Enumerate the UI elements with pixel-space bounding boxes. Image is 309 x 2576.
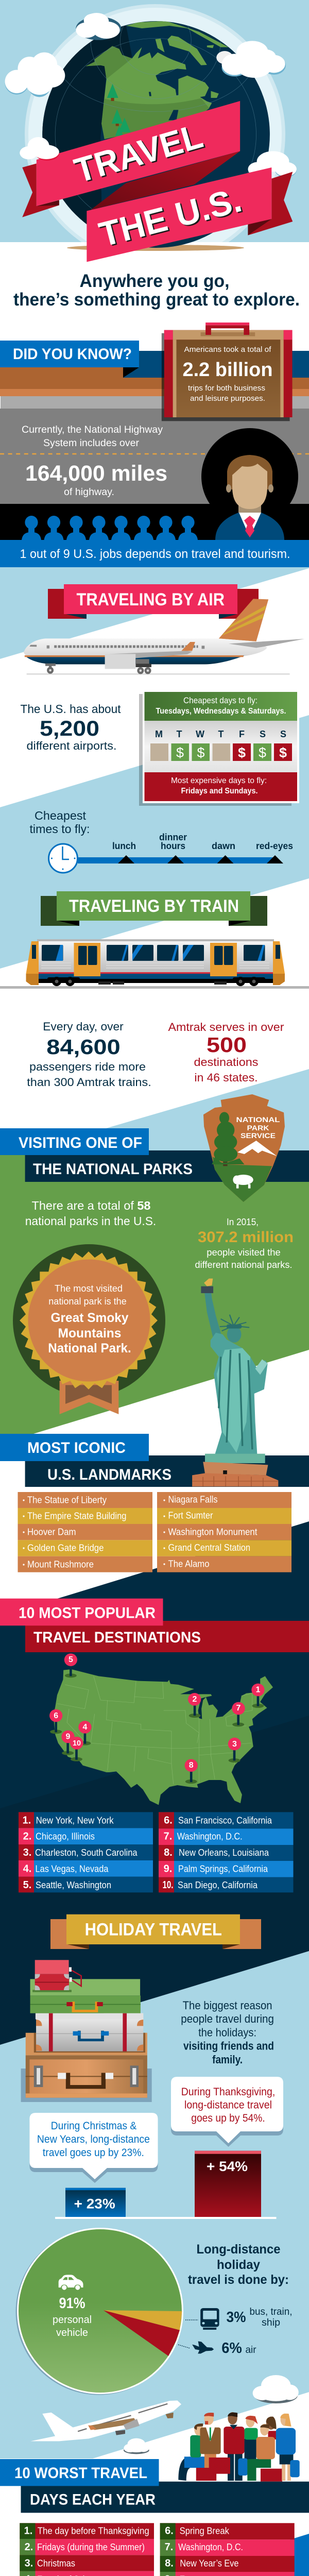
worst days table right: Washington, D.C. bbox=[178, 2542, 243, 2552]
weekday letters: F bbox=[239, 729, 245, 739]
illustration: group of travelers with luggage bbox=[178, 2412, 300, 2482]
text: 5,200 airports: The U.S. has about bbox=[21, 702, 121, 716]
worst days table right: Spring Break bbox=[180, 2526, 230, 2536]
pin 9 palm springs bbox=[61, 1731, 75, 1755]
destinations table left: 2. bbox=[23, 1831, 31, 1842]
pin 5 seattle: 5 bbox=[68, 1655, 73, 1664]
heading: 10 most popular travel destinations: TRAVEL DESTINATIONS bbox=[33, 1629, 201, 1646]
text: highway stat: System includes over bbox=[43, 438, 140, 449]
panel: light blue holiday background bbox=[0, 1951, 309, 2459]
pin 9 palm springs: 9 bbox=[66, 1733, 71, 1741]
most expensive days footer: Most expensive days to fly: bbox=[171, 776, 267, 785]
worst days table right: New Year’s Eve bbox=[180, 2558, 238, 2568]
cloud left bbox=[5, 53, 65, 97]
landmark list right bbox=[157, 1492, 291, 1572]
cheapest days header: Cheapest days to fly: bbox=[183, 696, 258, 705]
text: biggest reason for holiday travel: visiting friends and bbox=[183, 2040, 274, 2053]
speech bubble: thanksgiving: goes up by 54%. bbox=[191, 2112, 265, 2124]
heading ribbon: traveling by train bbox=[41, 891, 267, 926]
text: 500 amtrak destinations: destinations bbox=[194, 1056, 259, 1069]
text: 307.2 million visitors bbox=[195, 1217, 294, 1270]
subtitle: there’s something great to explore. bbox=[13, 290, 300, 310]
suitcase callout: 2.2 billion trips bbox=[162, 323, 293, 421]
text: 58 national parks: There are a total of 58 bbox=[32, 1199, 151, 1212]
landmark list left: Hoover Dam bbox=[27, 1527, 76, 1537]
landmark list right: Washington Monument bbox=[168, 1527, 258, 1537]
destinations table right: 7. bbox=[164, 1831, 172, 1842]
text: highway stat bbox=[22, 425, 167, 498]
text: biggest reason for holiday travel: people travel during bbox=[181, 2012, 274, 2025]
text: 58 national parks bbox=[25, 1199, 156, 1228]
panel: landmarks lists bbox=[18, 1492, 291, 1572]
title ribbon: the u.s. bbox=[87, 167, 293, 262]
timeline: cheapest flight times: hours bbox=[161, 841, 185, 851]
landmark list left: The Statue of Liberty bbox=[27, 1495, 107, 1505]
destinations table left: Seattle, Washington bbox=[36, 1880, 111, 1890]
destinations table left: 4. bbox=[23, 1863, 31, 1874]
text: 84,600 passengers: Every day, over bbox=[43, 1020, 124, 1033]
bar chart: holiday travel increase: + 54% bbox=[207, 2159, 248, 2174]
heading: did you know bbox=[0, 341, 139, 378]
title ribbon: travel bbox=[22, 101, 240, 217]
weekday letters bbox=[155, 729, 286, 739]
most expensive days footer: Fridays and Sundays. bbox=[181, 787, 258, 795]
destinations table left: Charleston, South Carolina bbox=[35, 1848, 138, 1858]
badge: most visited national park: The most visited bbox=[55, 1283, 123, 1294]
text: 307.2 million visitors: 307.2 million bbox=[198, 1229, 294, 1246]
landmark list left: Mount Rushmore bbox=[27, 1559, 94, 1569]
title ribbon: travel: TRAVEL bbox=[72, 117, 209, 191]
destinations table right: 8. bbox=[164, 1847, 173, 1858]
worst days table left: 2. bbox=[25, 2541, 33, 2553]
badge: most visited national park: National Park. bbox=[48, 1341, 131, 1355]
heading: long-distance holiday travel bbox=[188, 2242, 289, 2287]
landmark list right: Fort Sumter bbox=[168, 1511, 213, 1521]
pie chart: long-distance holiday travel mode: personal bbox=[53, 2314, 92, 2326]
text: cheapest times to fly bbox=[30, 809, 90, 836]
destinations table right: San Diego, California bbox=[178, 1880, 258, 1890]
traveler sitting in green bbox=[178, 2424, 205, 2481]
destinations table left bbox=[19, 1812, 153, 1892]
heading ribbon: traveling by train: TRAVELING BY TRAIN bbox=[69, 896, 239, 916]
heading: 10 most popular travel destinations bbox=[0, 1599, 309, 1652]
legend: bus train ship 3 percent: bus, train, bbox=[249, 2307, 293, 2317]
icon: clock bbox=[48, 844, 77, 873]
text: 307.2 million visitors: different national parks. bbox=[195, 1260, 293, 1270]
worst days table left bbox=[20, 2523, 154, 2576]
weekday letters: T bbox=[218, 729, 224, 739]
text: 84,600 passengers: passengers ride more bbox=[29, 1060, 146, 1073]
worst days table left: 3. bbox=[25, 2557, 33, 2569]
speech bubble: christmas and new years: During Christmas & bbox=[51, 2120, 136, 2132]
destinations table right: 10. bbox=[163, 1879, 173, 1891]
heading: visiting one of the national parks: VISITING ONE OF bbox=[19, 1134, 142, 1151]
worst days table right bbox=[160, 2523, 295, 2576]
pin 3 charleston bbox=[228, 1738, 241, 1762]
heading ribbon: holiday travel: HOLIDAY TRAVEL bbox=[85, 1920, 222, 1940]
weekday price squares: $ bbox=[259, 745, 266, 760]
suitcase callout: 2.2 billion trips: trips for both business bbox=[188, 384, 265, 393]
icon: national park service arrowhead badge: PARK bbox=[247, 1124, 269, 1132]
cheapest days header bbox=[144, 692, 297, 721]
speech bubble: christmas and new years bbox=[29, 2113, 158, 2183]
traveler sitting in orange bbox=[247, 2424, 282, 2482]
panel: blue footer diagonal bbox=[0, 2534, 309, 2576]
heading: long-distance holiday travel: Long-distance bbox=[197, 2242, 281, 2257]
heading: 10 most popular travel destinations: 10 MOST POPULAR bbox=[19, 1605, 156, 1622]
icon: businessman in black circle bbox=[201, 428, 298, 540]
subtitle: Anywhere you go, bbox=[79, 271, 230, 291]
badge ribbon bbox=[60, 1381, 118, 1414]
heading ribbon: holiday travel bbox=[50, 1914, 261, 1949]
text: 500 amtrak destinations bbox=[168, 1021, 284, 1084]
worst days table right: 7. bbox=[165, 2541, 173, 2553]
landmark list left: Golden Gate Bridge bbox=[27, 1543, 104, 1553]
timeline: cheapest flight times bbox=[48, 832, 293, 873]
icon: pine trees on globe bbox=[107, 84, 130, 135]
heading: 10 worst travel days each year: DAYS EACH YEAR bbox=[30, 2492, 156, 2509]
speech bubble: christmas and new years: New Years, long-distance bbox=[37, 2133, 150, 2145]
destinations table left: New York, New York bbox=[36, 1815, 114, 1825]
text: biggest reason for holiday travel bbox=[181, 1999, 274, 2066]
landmark list right: Niagara Falls bbox=[168, 1495, 217, 1505]
worst days table left: Fridays (during the Summer) bbox=[37, 2542, 145, 2552]
text: 500 amtrak destinations: Amtrak serves in over bbox=[168, 1021, 284, 1033]
destinations table right bbox=[159, 1812, 294, 1892]
statue of liberty illustration bbox=[192, 1279, 278, 1486]
legend: air 6 percent: air bbox=[245, 2345, 256, 2355]
destinations table left: 3. bbox=[23, 1847, 31, 1858]
text: cheapest times to fly: Cheapest bbox=[35, 809, 87, 822]
weekday price squares: $ bbox=[197, 745, 205, 760]
most expensive days footer bbox=[144, 772, 297, 801]
suitcase callout: 2.2 billion trips: 2.2 billion bbox=[182, 359, 273, 381]
destinations table right: 6. bbox=[164, 1815, 173, 1826]
pie chart: long-distance holiday travel mode: 91% bbox=[59, 2295, 85, 2312]
pin 5 seattle bbox=[64, 1653, 77, 1677]
icon: stacked suitcases bbox=[21, 1960, 152, 2102]
text: 307.2 million visitors: In 2015, bbox=[227, 1217, 259, 1227]
weekday letters: S bbox=[280, 729, 286, 739]
suitcase callout: 2.2 billion trips: and leisure purposes. bbox=[190, 394, 265, 403]
cheapest days header: Tuesdays, Wednesdays & Saturdays. bbox=[156, 707, 286, 716]
bar chart: holiday travel increase bbox=[55, 2151, 276, 2219]
weekday price squares bbox=[150, 743, 292, 761]
weekday letters: W bbox=[196, 729, 204, 739]
panel: navy destinations background bbox=[0, 1521, 309, 2045]
badge: most visited national park bbox=[13, 1244, 165, 1414]
starburst seal bbox=[20, 1251, 158, 1389]
traveler in red sweater bbox=[209, 2412, 245, 2481]
pie chart: long-distance holiday travel mode bbox=[15, 2229, 182, 2395]
heading ribbon: traveling by air bbox=[48, 584, 259, 619]
icon: national park service arrowhead badge bbox=[203, 1094, 285, 1202]
pin 3 charleston: 3 bbox=[232, 1740, 237, 1749]
suitcase callout: 2.2 billion trips: Americans took a total of bbox=[184, 345, 271, 354]
icon: national park service arrowhead badge: SERVICE bbox=[241, 1131, 276, 1140]
worst days table left: The day before Thanksgiving bbox=[38, 2526, 149, 2536]
text: 307.2 million visitors: people visited the bbox=[207, 1247, 281, 1258]
destinations table right: New Orleans, Louisiana bbox=[179, 1848, 269, 1858]
airplane taking off bbox=[30, 2400, 181, 2441]
traveler in brown suit bbox=[196, 2413, 221, 2481]
legend: bus train ship 3 percent: ship bbox=[262, 2317, 280, 2328]
legend: bus train ship 3 percent bbox=[185, 2307, 293, 2330]
weekday price squares: $ bbox=[238, 745, 246, 760]
jobs statistic band: 1 out of 9 U.S. jobs depends on travel and tourism. bbox=[20, 547, 290, 561]
landmark list left bbox=[18, 1492, 152, 1572]
pin 7 washington dc bbox=[232, 1702, 245, 1726]
text: highway stat: 164,000 miles bbox=[25, 461, 167, 486]
traveler in green top bbox=[238, 2416, 258, 2476]
heading ribbon: traveling by air: TRAVELING BY AIR bbox=[76, 590, 225, 609]
text: 58 national parks: national parks in the U.S. bbox=[25, 1214, 156, 1228]
cloud small under plane bbox=[124, 2438, 149, 2454]
icon: row of eight job silhouettes bbox=[22, 516, 198, 540]
destinations table right: San Francisco, California bbox=[178, 1815, 272, 1825]
text: 5,200 airports: 5,200 bbox=[40, 716, 99, 740]
weekday price squares: $ bbox=[176, 745, 184, 760]
weekday letters: M bbox=[155, 729, 163, 739]
timeline: cheapest flight times: red-eyes bbox=[256, 841, 293, 851]
legend: air 6 percent bbox=[178, 2340, 256, 2357]
destinations table left: 1. bbox=[23, 1815, 31, 1826]
destinations table right: Palm Springs, California bbox=[178, 1863, 268, 1874]
text: highway stat: of highway. bbox=[64, 487, 114, 498]
traveler behind in red bbox=[266, 2417, 277, 2439]
bar chart: holiday travel increase: + 23% bbox=[74, 2196, 115, 2212]
icon: train front bbox=[200, 2308, 219, 2330]
title ribbon: the u.s.: THE U.S. bbox=[95, 180, 246, 255]
cloud small on ribbon bbox=[20, 137, 59, 161]
airplane illustration bbox=[24, 599, 304, 674]
text: biggest reason for holiday travel: family. bbox=[212, 2053, 243, 2066]
speech bubble: christmas and new years: travel goes up by 23%. bbox=[43, 2147, 144, 2159]
badge: most visited national park: Mountains bbox=[58, 1326, 122, 1341]
timeline: cheapest flight times: dinner bbox=[159, 832, 187, 842]
pin 2 chicago bbox=[188, 1693, 201, 1718]
pin 10 san diego bbox=[70, 1737, 83, 1761]
pin 4 las vegas bbox=[78, 1721, 92, 1745]
destinations table left: Chicago, Illinois bbox=[36, 1832, 95, 1842]
heading: long-distance holiday travel: travel is done by: bbox=[188, 2273, 289, 2287]
icon: airplane silhouette bbox=[192, 2341, 214, 2353]
destinations table right: Washington, D.C. bbox=[177, 1832, 243, 1842]
heading: visiting one of the national parks bbox=[0, 1128, 309, 1182]
legend: air 6 percent: 6% bbox=[221, 2340, 242, 2357]
heading: 10 worst travel days each year: 10 WORST TRAVEL bbox=[14, 2465, 147, 2482]
panel: did you know background bands bbox=[0, 351, 309, 540]
panel: cheapest and most expensive days calendar bbox=[139, 690, 299, 806]
icon: national park service arrowhead badge: NATIONAL bbox=[236, 1115, 280, 1124]
text: biggest reason for holiday travel: The biggest reason bbox=[183, 1999, 272, 2012]
pin 6 san francisco bbox=[49, 1709, 62, 1734]
title ribbon: travel: TRAVEL bbox=[70, 116, 207, 190]
globe hero illustration bbox=[20, 0, 285, 265]
pin 10 san diego: 10 bbox=[73, 1739, 81, 1748]
landmark list right: Grand Central Station bbox=[168, 1543, 250, 1553]
cloud right bbox=[216, 41, 286, 78]
destinations table left: 5. bbox=[23, 1879, 31, 1891]
pin 6 san francisco: 6 bbox=[54, 1711, 58, 1720]
cloud upper right bbox=[253, 2375, 299, 2403]
badge: most visited national park: national park is the bbox=[48, 1296, 127, 1307]
text: cheapest times to fly: times to fly: bbox=[30, 822, 90, 836]
pin 7 washington dc: 7 bbox=[236, 1704, 241, 1713]
text: 500 amtrak destinations: 500 bbox=[207, 1033, 247, 1057]
heading: visiting one of the national parks: THE NATIONAL PARKS bbox=[33, 1161, 193, 1178]
worst days table right: 6. bbox=[165, 2525, 174, 2536]
cloud top bbox=[76, 13, 121, 40]
text: 5,200 airports bbox=[21, 702, 121, 752]
worst days table left: Christmas bbox=[37, 2558, 75, 2568]
pin 2 chicago: 2 bbox=[193, 1695, 197, 1704]
badge: most visited national park: Great Smoky bbox=[50, 1311, 129, 1325]
text: 84,600 passengers: 84,600 bbox=[46, 1035, 121, 1059]
landmark list right: The Alamo bbox=[168, 1559, 209, 1569]
heading: 10 worst travel days each year bbox=[0, 2459, 309, 2513]
map of the contiguous united states bbox=[53, 1669, 273, 1805]
weekday price squares: $ bbox=[279, 745, 287, 760]
text: 5,200 airports: different airports. bbox=[27, 739, 116, 752]
pie chart: long-distance holiday travel mode: vehicle bbox=[56, 2327, 88, 2338]
panel: diagonal sky and white backgrounds air and train bbox=[0, 567, 309, 1182]
icon: car bbox=[59, 2275, 83, 2291]
weekday letters: S bbox=[260, 729, 266, 739]
speech bubble: thanksgiving: long-distance travel bbox=[184, 2099, 272, 2111]
text: 84,600 passengers: than 300 Amtrak trains. bbox=[27, 1076, 151, 1089]
worst days table right: 8. bbox=[165, 2557, 174, 2569]
timeline: cheapest flight times: lunch bbox=[112, 841, 136, 851]
pin 4 las vegas: 4 bbox=[83, 1723, 88, 1732]
subtitle bbox=[13, 271, 300, 310]
heading: most iconic u.s. landmarks bbox=[0, 1434, 309, 1487]
pin 1 new york: 1 bbox=[256, 1686, 261, 1694]
panel: national parks green background bbox=[0, 1155, 309, 1434]
timeline: cheapest flight times: dawn bbox=[212, 841, 235, 851]
cloud lower right bbox=[248, 151, 297, 177]
destinations table left: Las Vegas, Nevada bbox=[35, 1863, 109, 1874]
speech bubble: thanksgiving: During Thanksgiving, bbox=[181, 2086, 275, 2098]
pin 1 new york bbox=[251, 1684, 265, 1708]
pin 8 new orleans: 8 bbox=[189, 1761, 194, 1770]
heading: long-distance holiday travel: holiday bbox=[217, 2258, 260, 2272]
heading: most iconic u.s. landmarks: U.S. LANDMARKS bbox=[47, 1466, 171, 1483]
traveler in blue bbox=[276, 2414, 300, 2481]
text: biggest reason for holiday travel: the holidays: bbox=[198, 2026, 256, 2039]
speech bubble: thanksgiving bbox=[171, 2077, 283, 2147]
jobs statistic band bbox=[0, 540, 309, 567]
heading: did you know: DID YOU KNOW? bbox=[13, 346, 132, 363]
text: highway stat: Currently, the National Highway bbox=[22, 425, 163, 435]
landmark list left: The Empire State Building bbox=[27, 1511, 127, 1521]
pin 8 new orleans bbox=[185, 1759, 198, 1784]
legend: bus train ship 3 percent: 3% bbox=[227, 2309, 246, 2326]
text: 84,600 passengers bbox=[27, 1020, 151, 1089]
destinations table right: 9. bbox=[164, 1863, 172, 1874]
train illustration bbox=[0, 939, 309, 989]
weekday letters: T bbox=[176, 729, 182, 739]
heading: most iconic u.s. landmarks: MOST ICONIC bbox=[27, 1439, 126, 1456]
sky background panel bbox=[0, 0, 309, 242]
worst days table left: 1. bbox=[24, 2525, 32, 2536]
text: 500 amtrak destinations: in 46 states. bbox=[195, 1071, 258, 1084]
title ribbon: the u.s.: THE U.S. bbox=[97, 181, 247, 256]
